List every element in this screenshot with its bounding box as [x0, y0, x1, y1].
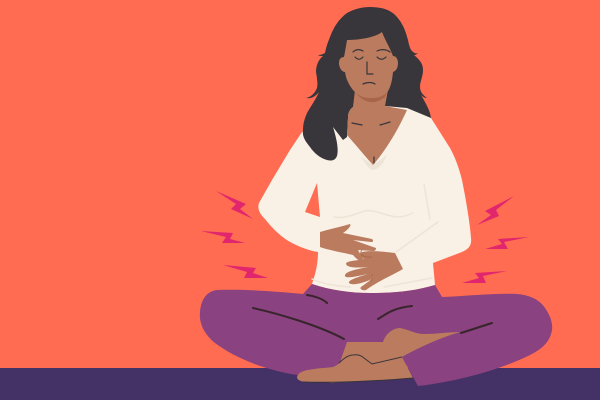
hands: [320, 224, 403, 290]
mouth: [363, 82, 375, 84]
shirt: [258, 100, 471, 293]
pain bolts left: [201, 191, 268, 278]
trouser shape: [200, 284, 552, 386]
arm gap: [305, 183, 320, 217]
chin shadow: [354, 90, 388, 102]
face skin: [339, 32, 398, 98]
face: [339, 32, 398, 102]
trouser creases: [253, 295, 344, 339]
eyes and brows: [353, 50, 390, 59]
shirt body and sleeves: [258, 100, 471, 293]
collarbones and chest line: [352, 122, 390, 163]
bolt 5: [485, 237, 529, 249]
knee crease: [461, 323, 492, 333]
back foot and ankle: [330, 328, 460, 383]
finger lines: [361, 250, 373, 281]
bolt 6: [462, 271, 507, 283]
bolt 1: [216, 191, 253, 219]
shirt creases: [312, 184, 438, 287]
front foot: [297, 355, 413, 382]
toe outline: [303, 355, 413, 382]
hair: [303, 7, 431, 161]
nose: [367, 62, 373, 74]
feet: [297, 323, 492, 386]
bolt 2: [201, 231, 245, 243]
bolt 3: [223, 265, 268, 278]
upper hand: [320, 224, 376, 261]
pain bolts right: [462, 196, 529, 283]
floor: [0, 368, 600, 400]
neck and chest: [347, 90, 407, 165]
trouser leg over foot: [402, 332, 480, 386]
neckline shade: [361, 155, 387, 170]
trousers: [200, 284, 552, 386]
lower hand: [345, 251, 403, 290]
bolt 4: [477, 196, 514, 225]
